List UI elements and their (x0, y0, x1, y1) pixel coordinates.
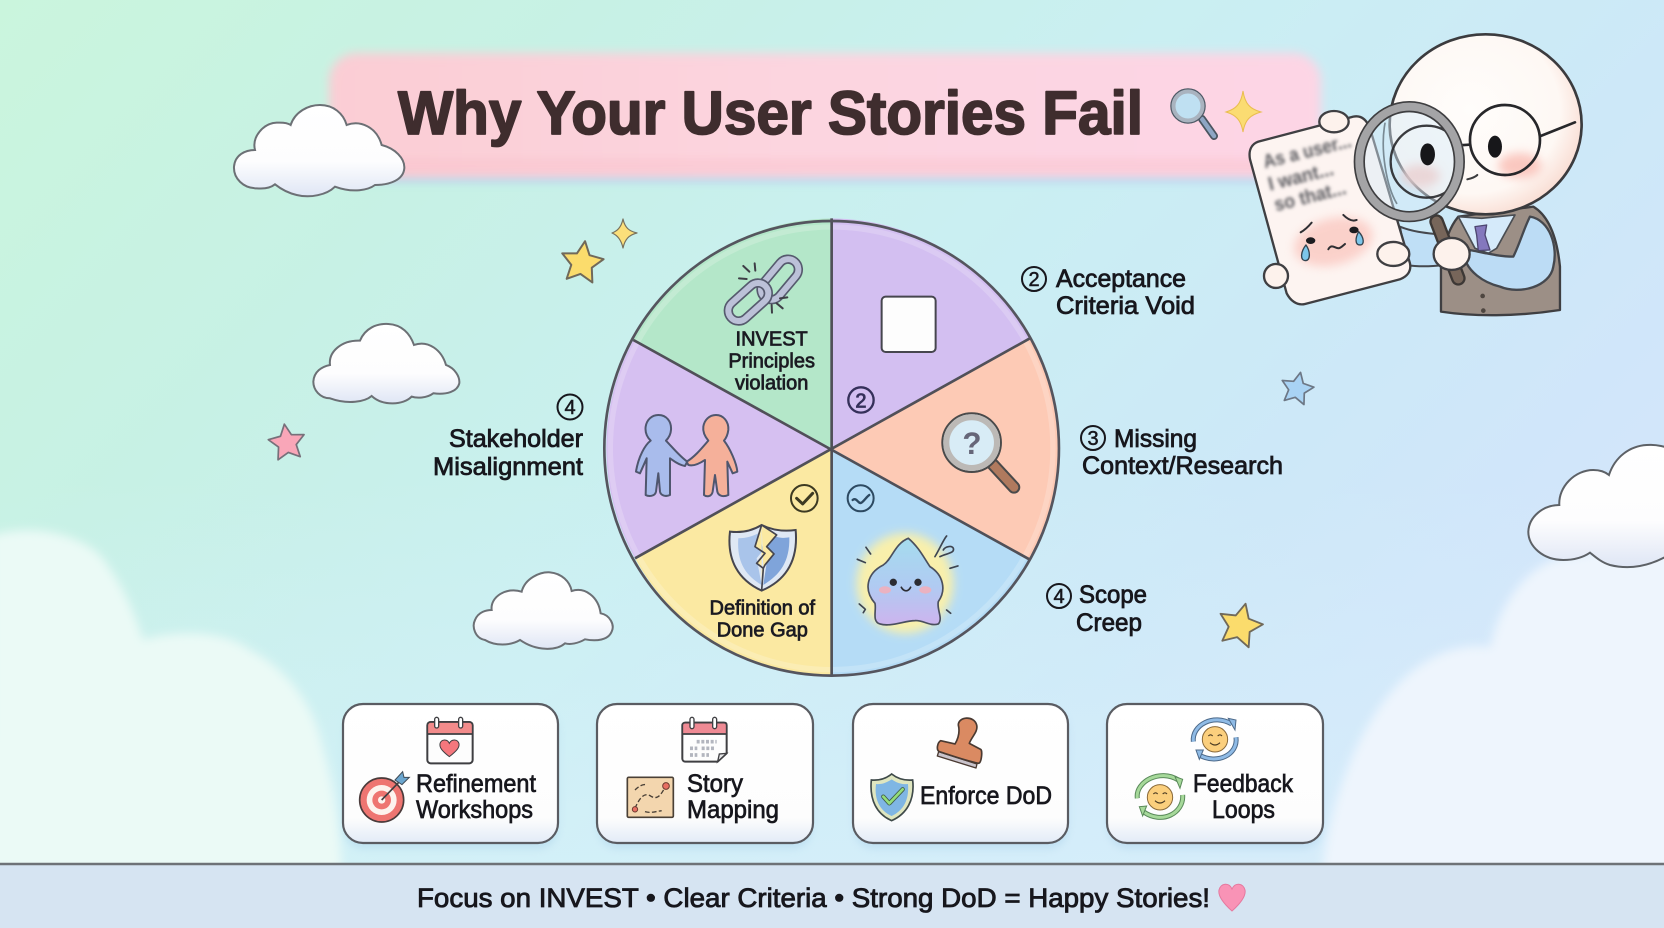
card blurred text: so that... (1272, 178, 1348, 216)
label: invest principles violation: violation (735, 372, 808, 394)
soft background cloud: bottom left (0, 530, 342, 875)
shirt collar (1458, 215, 1515, 253)
number badge 4: 4 (564, 397, 576, 419)
shirt arm (1467, 217, 1555, 290)
star: pink (266, 422, 307, 461)
label: missing context research (1081, 425, 1283, 480)
sparkle: small yellow (612, 219, 637, 248)
number badge 2: 2 (855, 390, 867, 412)
star: blue (1278, 369, 1316, 406)
cloud: top left (234, 105, 404, 196)
label: scope creep: Scope (1079, 581, 1147, 609)
number badge 4 (558, 394, 582, 420)
number badge 4: 4 (1053, 586, 1065, 608)
card: refinement workshops: Refinement (416, 770, 536, 798)
label: invest principles violation (728, 329, 815, 394)
eye right (1488, 136, 1502, 158)
label: invest principles violation: Principles (728, 351, 815, 373)
icon: broken shield (729, 525, 796, 591)
icon: magnifier with question mark (942, 413, 1014, 487)
card: feedback loops (1107, 704, 1323, 849)
icon: target with arrow (360, 772, 409, 822)
hand bottom left of card (1264, 264, 1288, 288)
label: scope creep: Creep (1076, 609, 1142, 637)
segment: missing context (832, 338, 1058, 559)
soft background cloud: bottom right (1322, 535, 1664, 875)
icon: blue loop smiley (1193, 718, 1236, 759)
label: scope creep (1047, 581, 1147, 637)
label: acceptance criteria void: Criteria Void (1056, 292, 1195, 320)
card: refinement workshops: Workshops (416, 796, 533, 824)
head (1390, 34, 1582, 214)
icon: broken chain (724, 255, 803, 325)
mouth (1467, 175, 1477, 179)
glasses temple and bridge (1459, 122, 1575, 145)
icon: footer heart (1219, 884, 1245, 911)
icon: check badge blue (848, 485, 874, 511)
title banner (329, 53, 1321, 183)
hand right of card (1377, 242, 1409, 266)
icon: check badge yellow (791, 485, 818, 512)
mascot with magnifier and sad story card (1250, 34, 1582, 315)
card: story mapping (597, 704, 813, 849)
card: feedback loops: Loops (1212, 796, 1275, 824)
magnifying glass lens (1359, 107, 1463, 217)
label: definition of done gap: Definition of (710, 597, 816, 619)
card: enforce dod: Enforce DoD (920, 782, 1052, 810)
tie (1475, 225, 1490, 251)
card: feedback loops: Feedback (1193, 770, 1293, 798)
hand top of card (1319, 111, 1349, 132)
segment: invest principles (633, 218, 832, 448)
right glasses lens (1470, 105, 1540, 175)
icon: magnifier with question mark: ? (962, 426, 982, 461)
icon: rubber stamp (937, 718, 982, 768)
title: Why Your User Stories Fail (398, 79, 1143, 147)
icon: calendar (682, 717, 727, 762)
card sad face (1289, 209, 1378, 274)
footer tagline: Focus on INVEST • Clear Criteria • Strong DoD = Happy Stories! (417, 883, 1210, 913)
icon: title sparkle (1226, 91, 1261, 132)
star: yellow upper left (559, 238, 606, 284)
card: enforce dod (853, 704, 1068, 849)
icon: stakeholders holding hands (636, 415, 737, 496)
label: acceptance criteria void (1022, 265, 1195, 320)
icon: treasure map (627, 777, 673, 817)
icon: heart calendar (427, 717, 473, 763)
label: definition of done gap: Done Gap (717, 620, 808, 642)
label: invest principles violation: INVEST (736, 329, 808, 351)
star: yellow lower right (1214, 598, 1267, 649)
cloud: middle left (313, 324, 459, 403)
pie wheel of failure causes (604, 218, 1059, 677)
icon: scope creep blob (857, 533, 958, 633)
label: missing context research: Missing (1114, 425, 1197, 453)
label: definition of done gap (710, 597, 816, 642)
cloud: lower centre (474, 572, 613, 649)
icon: empty checkbox (882, 297, 936, 352)
label: stakeholder misalignment: Stakeholder (449, 425, 583, 453)
number badge 2 (848, 387, 874, 413)
card blurred text (1261, 131, 1354, 216)
segment: stakeholder misalignment (606, 340, 832, 558)
footer band (0, 864, 1664, 928)
label: acceptance criteria void: Acceptance (1056, 265, 1186, 293)
segment: definition of done (635, 448, 832, 677)
label: stakeholder misalignment: Misalignment (433, 453, 583, 481)
segment: acceptance criteria (832, 218, 1030, 448)
card: story mapping: Mapping (687, 796, 779, 824)
magnifying glass handle (1437, 222, 1458, 278)
cloud: right edge (1528, 445, 1664, 567)
left arm behind card (1400, 227, 1443, 266)
card: story mapping: Story (687, 770, 743, 798)
vest (1441, 207, 1560, 315)
icon: green loop smiley (1137, 776, 1183, 817)
label: stakeholder misalignment (433, 394, 583, 481)
card blurred text: As a user... (1261, 131, 1354, 173)
icon: check shield (871, 774, 913, 821)
label: missing context research: Context/Research (1082, 452, 1283, 480)
sad user story card (1250, 116, 1410, 304)
card: refinement workshops (343, 704, 558, 849)
number badge 2: 2 (1028, 269, 1040, 291)
segment: scope creep (832, 448, 1029, 677)
hand holding magnifier (1434, 238, 1470, 270)
cheek blush (1498, 153, 1542, 178)
number badge 3 (1081, 426, 1105, 450)
number badge 2 (1022, 267, 1046, 291)
number badge 3: 3 (1087, 428, 1099, 450)
card blurred text: I want... (1266, 159, 1336, 195)
icon: title magnifier (1171, 89, 1214, 136)
